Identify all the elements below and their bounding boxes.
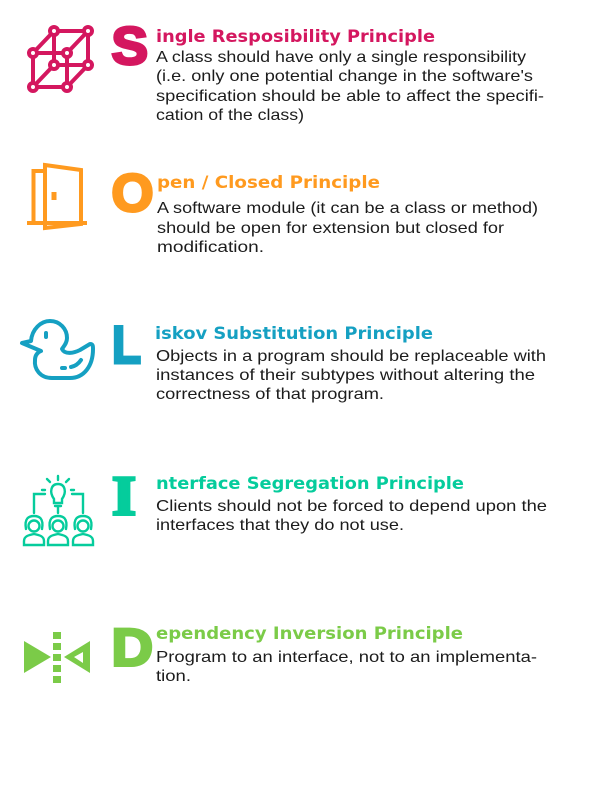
panel: dependency inversion [24,618,537,685]
icon: wireframe cube [29,27,92,91]
body text: (i.e. only one potential change in the software's [156,68,533,85]
big letter D: D [112,618,153,678]
body text: modification. [157,239,264,256]
body text [156,649,537,685]
panel: liskov [22,316,546,403]
icon: mirrored triangles [24,632,90,683]
body text: A software module (it can be a class or method) [157,200,538,217]
icon: door [27,165,87,228]
body text [156,348,546,403]
heading: ingle Resposibility Principle [156,27,435,47]
body text: Objects in a program should be replaceable with [156,348,546,365]
body text: specification should be able to affect the specifi- [156,88,544,105]
heading: nterface Segregation Principle [156,474,464,494]
big letter I: I [112,466,136,528]
heading: iskov Substitution Principle [155,324,433,344]
icon: lightbulb and three people [24,476,93,545]
body text: instances of their subtypes without altering the [156,367,535,384]
heading: ependency Inversion Principle [156,624,463,644]
big letter L: L [112,316,141,375]
heading: pen / Closed Principle [157,173,380,193]
body text: should be open for extension but closed for [157,220,505,237]
big letter O: O [112,164,154,223]
body text: Clients should not be forced to depend upon the [156,498,547,515]
body text [157,200,538,256]
body text: cation of the class) [156,107,304,124]
body text: Program to an interface, not to an implementa- [156,649,537,666]
body text [156,49,544,124]
panel: single responsibility [29,17,544,124]
icon: rubber duck [22,321,93,378]
body text: interfaces that they do not use. [156,517,404,534]
panel: interface segregation [24,466,547,545]
body text [156,498,547,534]
body text: A class should have only a single responsibility [156,49,526,66]
big letter S: S [112,17,148,76]
panel: open closed [27,164,538,256]
body text: correctness of that program. [156,386,384,403]
body text: tion. [156,668,191,685]
